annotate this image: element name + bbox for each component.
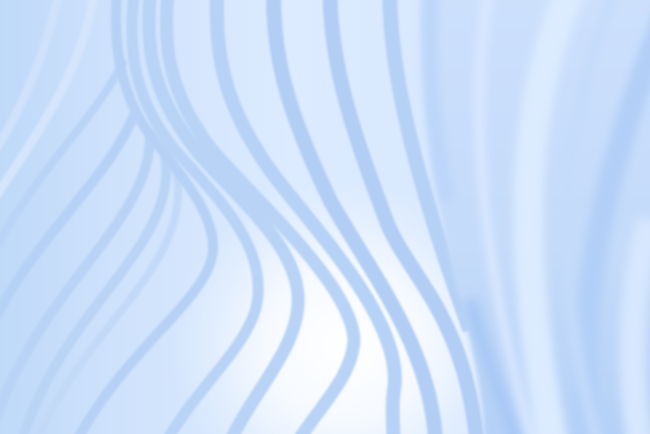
right blurred panel (420, 0, 650, 434)
band 3 (149, 0, 298, 434)
band 8 (390, 0, 470, 330)
band 4 (166, 0, 354, 434)
band 7 (330, 0, 478, 434)
central white glow (130, 170, 530, 434)
right soft streaks (430, 0, 650, 434)
band 6 (274, 0, 436, 434)
left upper-corner soft bands (0, 0, 178, 434)
main S-curve bands (70, 0, 478, 434)
band 2 (132, 0, 258, 434)
band 5 (217, 0, 395, 434)
band 1 (70, 0, 213, 434)
